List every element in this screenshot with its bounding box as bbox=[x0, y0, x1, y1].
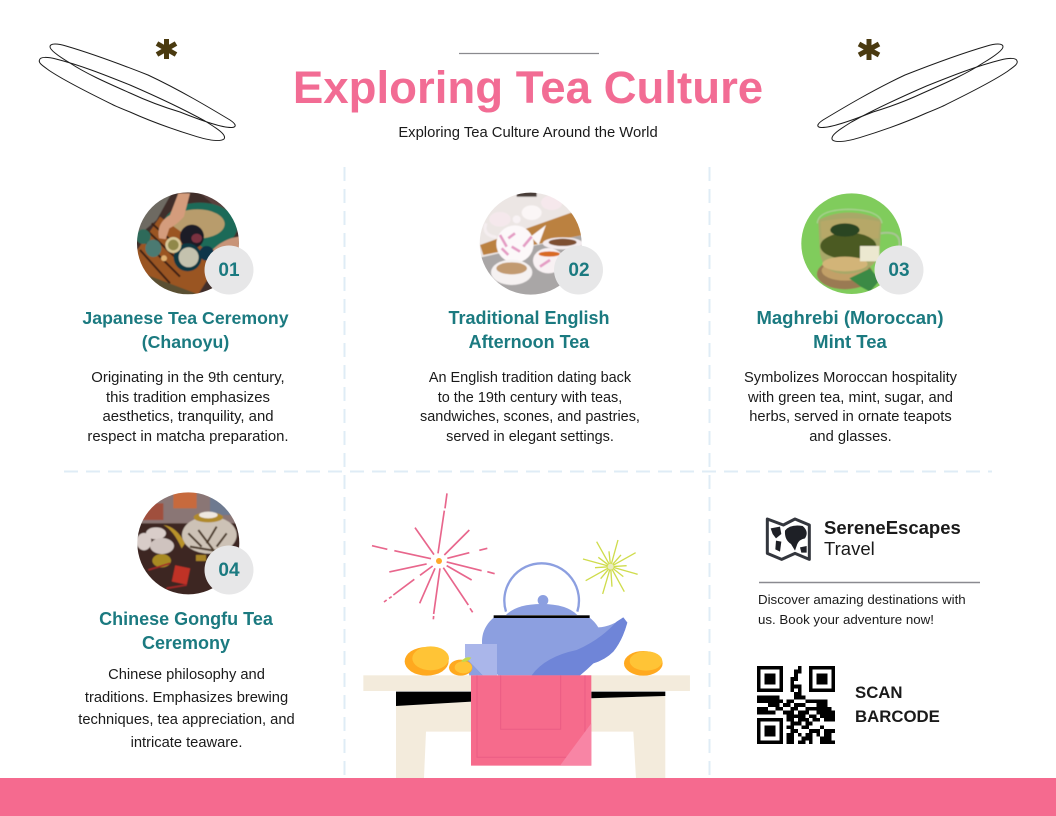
oranges bbox=[405, 646, 663, 676]
photo: Japanese tea ceremony bbox=[137, 192, 239, 294]
scan label bbox=[855, 683, 940, 726]
heading: Japanese Tea Ceremony: (Chanoyu) bbox=[142, 332, 229, 352]
brand name bbox=[824, 517, 961, 559]
badge number 03: 03 bbox=[888, 260, 910, 281]
photo: English afternoon tea bbox=[480, 192, 582, 295]
text: Chinese Gongfu: intricate teaware. bbox=[131, 734, 242, 750]
tea cup bbox=[465, 644, 497, 675]
badge number 02: 02 bbox=[568, 260, 590, 281]
icon: asterisk right bbox=[859, 39, 879, 60]
teapot bbox=[482, 563, 627, 675]
firework: pink bbox=[372, 493, 495, 619]
text: Moroccan Mint Tea: and glasses. bbox=[809, 428, 892, 444]
heading: Japanese Tea Ceremony bbox=[82, 308, 289, 352]
table bbox=[363, 675, 690, 778]
text: English Afternoon Tea: to the 19th century with teas, bbox=[438, 390, 622, 406]
footer text bbox=[758, 592, 966, 627]
illustration: tea table bbox=[363, 493, 690, 778]
heading: English Afternoon Tea: Afternoon Tea bbox=[469, 332, 589, 352]
heading: Japanese Tea Ceremony: Japanese Tea Ceremony bbox=[82, 308, 289, 328]
badge number 01: 01 bbox=[218, 260, 240, 281]
table cloth bbox=[471, 675, 591, 766]
badge: 03 bbox=[874, 246, 924, 294]
scan label: BARCODE bbox=[855, 707, 940, 726]
text: English Afternoon Tea bbox=[420, 370, 640, 444]
heading: Chinese Gongfu: Chinese Gongfu Tea bbox=[99, 609, 273, 629]
text: Moroccan Mint Tea: with green tea, mint, sugar, and bbox=[748, 390, 953, 406]
photo: Moroccan mint tea bbox=[800, 190, 903, 297]
text: English Afternoon Tea: sandwiches, scones, and pastries, bbox=[420, 409, 640, 425]
scan label: SCAN bbox=[855, 683, 903, 702]
footer bar bbox=[0, 778, 1056, 816]
text: Japanese Tea Ceremony bbox=[87, 370, 289, 444]
heading: English Afternoon Tea: Traditional English bbox=[448, 308, 610, 328]
text: Moroccan Mint Tea: Symbolizes Moroccan hospitality bbox=[744, 370, 957, 386]
text: Moroccan Mint Tea bbox=[744, 370, 957, 444]
footer text: Discover amazing destinations with bbox=[758, 592, 966, 607]
footer text: us. Book your adventure now! bbox=[758, 612, 934, 627]
badge: 02 bbox=[554, 246, 603, 294]
badge: 01 bbox=[204, 246, 254, 294]
text: Moroccan Mint Tea: herbs, served in ornate teapots bbox=[749, 409, 952, 425]
title: Exploring Tea Culture bbox=[293, 62, 763, 113]
text: Japanese Tea Ceremony: this tradition emphasizes bbox=[106, 390, 270, 406]
heading: Chinese Gongfu: Ceremony bbox=[142, 633, 230, 653]
icon: map logo bbox=[767, 519, 809, 559]
text: Japanese Tea Ceremony: Originating in the 9th century, bbox=[91, 370, 285, 386]
photo: Chinese gongfu tea bbox=[137, 492, 240, 598]
heading: Moroccan Mint Tea: Mint Tea bbox=[813, 331, 887, 352]
badge number 04: 04 bbox=[218, 560, 240, 581]
text: Chinese Gongfu: techniques, tea appreciation, and bbox=[78, 712, 295, 728]
firework: green bbox=[583, 540, 638, 594]
text: English Afternoon Tea: An English tradition dating back bbox=[429, 370, 631, 386]
heading: English Afternoon Tea bbox=[448, 308, 610, 352]
brand name: SereneEscapes bbox=[824, 517, 961, 538]
subtitle: Exploring Tea Culture Around the World bbox=[398, 125, 658, 141]
icon: asterisk left bbox=[157, 39, 176, 59]
text: Japanese Tea Ceremony: respect in matcha preparation. bbox=[87, 428, 289, 444]
text: Chinese Gongfu: traditions. Emphasizes brewing bbox=[85, 690, 288, 706]
brand name: Travel bbox=[824, 538, 875, 559]
QR code bbox=[757, 666, 835, 744]
text: Chinese Gongfu: Chinese philosophy and bbox=[108, 667, 265, 683]
heading: Moroccan Mint Tea bbox=[756, 307, 944, 352]
decorative swirl: top right bbox=[818, 44, 1017, 142]
heading: Chinese Gongfu bbox=[99, 609, 273, 653]
heading: Moroccan Mint Tea: Maghrebi (Moroccan) bbox=[756, 307, 944, 328]
text: English Afternoon Tea: served in elegant settings. bbox=[446, 428, 614, 444]
text: Japanese Tea Ceremony: aesthetics, tranquility, and bbox=[102, 409, 274, 425]
badge: 04 bbox=[204, 546, 254, 594]
decorative swirl: top left bbox=[39, 44, 235, 141]
text: Chinese Gongfu bbox=[78, 667, 295, 750]
